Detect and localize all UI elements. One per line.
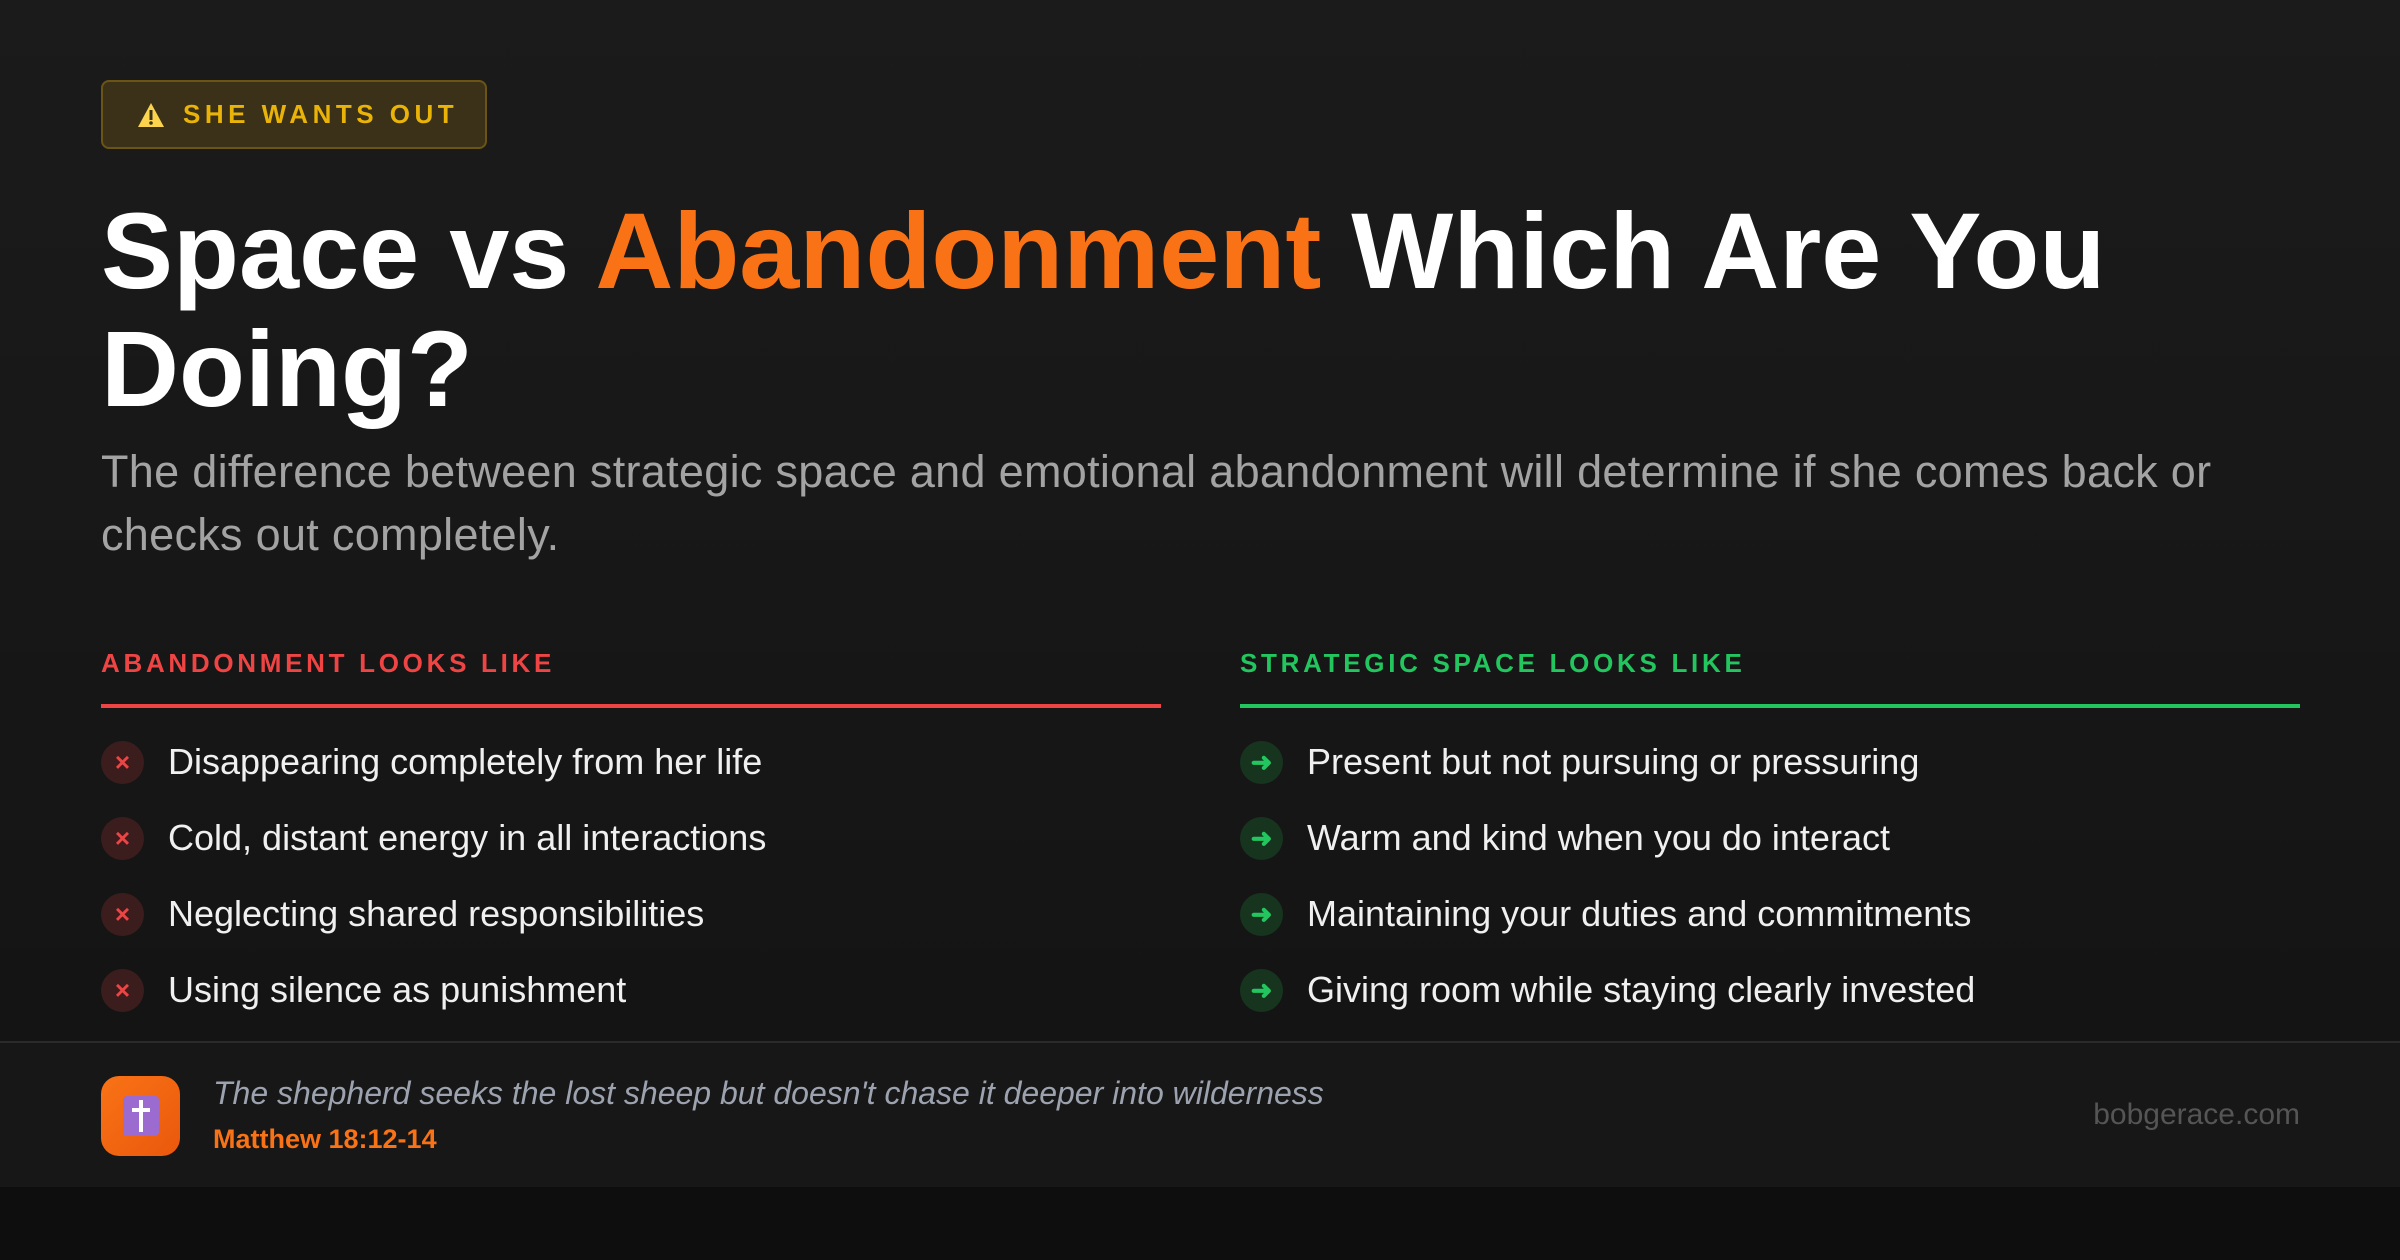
- website: bobgerace.com: [2093, 1098, 2300, 1131]
- item: ➜: [1251, 898, 1272, 928]
- item: ➜: [1251, 746, 1272, 776]
- panel: strategic space: [1240, 648, 2300, 1012]
- item: ×: [115, 746, 130, 776]
- item: ×: [115, 974, 130, 1004]
- heading: strategic space: STRATEGIC SPACE LOOKS LIKE: [1240, 648, 1745, 678]
- icon: cross: [101, 1076, 180, 1156]
- item: Maintaining your duties and commitments: [1307, 893, 1971, 934]
- item: ➜: [1251, 822, 1272, 852]
- badge: SHE WANTS OUT: [183, 99, 458, 129]
- item: ➜: [1251, 974, 1272, 1004]
- item: ×: [115, 822, 130, 852]
- subtitle: The difference between strategic space and emotional abandonment will determine if she comes back or checks out completely.: [101, 446, 2211, 560]
- item: Neglecting shared responsibilities: [168, 893, 704, 934]
- item: Giving room while staying clearly invested: [1307, 969, 1975, 1010]
- quote: The shepherd seeks the lost sheep but doesn't chase it deeper into wilderness: [213, 1075, 1324, 1111]
- panel: abandonment: [101, 648, 1161, 1012]
- item: Using silence as punishment: [168, 969, 626, 1010]
- reference: Matthew 18:12-14: [213, 1124, 437, 1154]
- badge: [101, 80, 487, 149]
- item: Present but not pursuing or pressuring: [1307, 741, 1919, 782]
- title: Space vs Abandonment Which Are You Doing?: [101, 190, 2105, 429]
- item: ×: [115, 898, 130, 928]
- footer: [0, 1041, 2400, 1187]
- item: Warm and kind when you do interact: [1307, 817, 1890, 858]
- heading: abandonment: ABANDONMENT LOOKS LIKE: [101, 648, 555, 678]
- item: Disappearing completely from her life: [168, 741, 762, 782]
- item: Cold, distant energy in all interactions: [168, 817, 766, 858]
